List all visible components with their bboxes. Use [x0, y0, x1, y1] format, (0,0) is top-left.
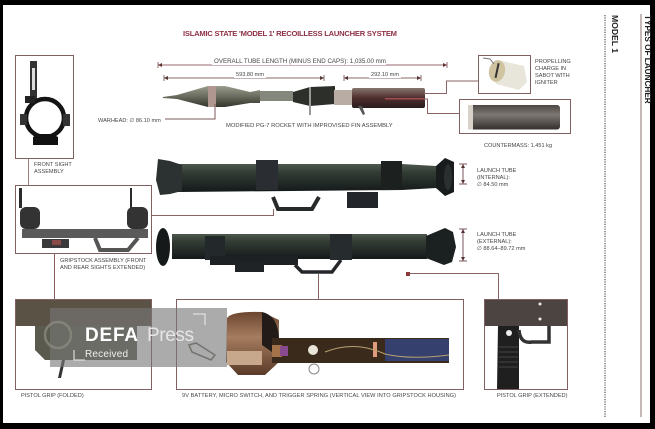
dimension: 292.10 mm: 292.10 mm [371, 72, 399, 78]
watermark [45, 308, 227, 367]
launch tube internal label: (INTERNAL): [477, 175, 510, 181]
external diameter arrow [459, 229, 467, 261]
battery panel label: 9V BATTERY, MICRO SWITCH, AND TRIGGER SPRING (VERTICAL VIEW INTO GRIPSTOCK HOUSING) [182, 393, 456, 399]
panel: pistol grip folded [16, 300, 152, 390]
panel: propelling charge [478, 56, 530, 94]
pistol grip extended label: PISTOL GRIP (EXTENDED) [497, 393, 568, 399]
front sight label: FRONT SIGHT [34, 162, 72, 168]
sidebar: model label: MODEL 1 [610, 15, 620, 53]
launch tube bottom photo [156, 228, 456, 272]
internal diameter arrow [459, 164, 467, 184]
dimension: 593.80 mm [164, 71, 324, 81]
warhead leader line and label [98, 104, 215, 124]
dimension: 593.80 mm: 593.80 mm [236, 72, 264, 78]
launch tube external label: (EXTERNAL): [477, 239, 512, 245]
warhead leader line and label: WARHEAD: ∅ 86.10 mm [98, 117, 161, 124]
front sight label: ASSEMBLY [34, 169, 64, 175]
propelling charge label: CHARGE IN [535, 66, 566, 72]
dimension: overall tube length: OVERALL TUBE LENGTH (MINUS END CAPS): 1,035.00 mm [214, 58, 386, 65]
connector front sight to grip stock [28, 159, 30, 185]
watermark: DEFA [85, 325, 138, 346]
launch tube internal label: ∅ 84.50 mm [477, 181, 509, 188]
panel: pistol grip extended [484, 300, 568, 390]
dimension: 292.10 mm [344, 71, 421, 81]
title: ISLAMIC STATE 'MODEL 1' RECOILLESS LAUNCHER SYSTEM [183, 29, 397, 38]
launch tube external label: ∅ 88.64–89.72 mm [477, 245, 526, 252]
propelling charge label: PROPELLING [535, 59, 571, 65]
launch tube internal label: LAUNCH TUBE [477, 168, 517, 174]
panel: gripstock assembly [16, 186, 152, 254]
sidebar dotted divider [604, 15, 606, 418]
countermass label: COUNTERMASS: 1.451 kg [484, 143, 552, 149]
propelling charge label: SABOT WITH [535, 73, 570, 79]
launch tube top photo [156, 158, 454, 209]
panel: battery and switch [176, 300, 464, 390]
panel: countermass [460, 100, 570, 134]
leader to pistol grip extended [406, 272, 498, 299]
gripstock label: AND REAR SIGHTS EXTENDED) [60, 265, 145, 271]
rocket caption: MODIFIED PG-7 ROCKET WITH IMPROVISED FIN ASSEMBLY [226, 123, 393, 129]
pistol grip folded label: PISTOL GRIP (FOLDED) [21, 393, 84, 399]
sidebar solid divider [640, 14, 642, 417]
dimension: overall tube length [158, 56, 447, 68]
launch tube external label: LAUNCH TUBE [477, 232, 517, 238]
watermark: Received [85, 349, 128, 360]
panel: front sight [16, 56, 74, 158]
gripstock label: GRIPSTOCK ASSEMBLY (FRONT [60, 258, 147, 264]
connector tube to battery panel [318, 274, 320, 299]
rocket photo [163, 86, 425, 115]
connector tube to gripstock [152, 209, 274, 216]
connector gripstock to pistol grip [54, 254, 56, 299]
leader lines from rocket to side panels [424, 81, 478, 114]
sidebar: section label: TYPES OF LAUNCHER [643, 15, 652, 104]
watermark: Press [147, 325, 194, 346]
propelling charge label: IGNITER [535, 80, 558, 86]
